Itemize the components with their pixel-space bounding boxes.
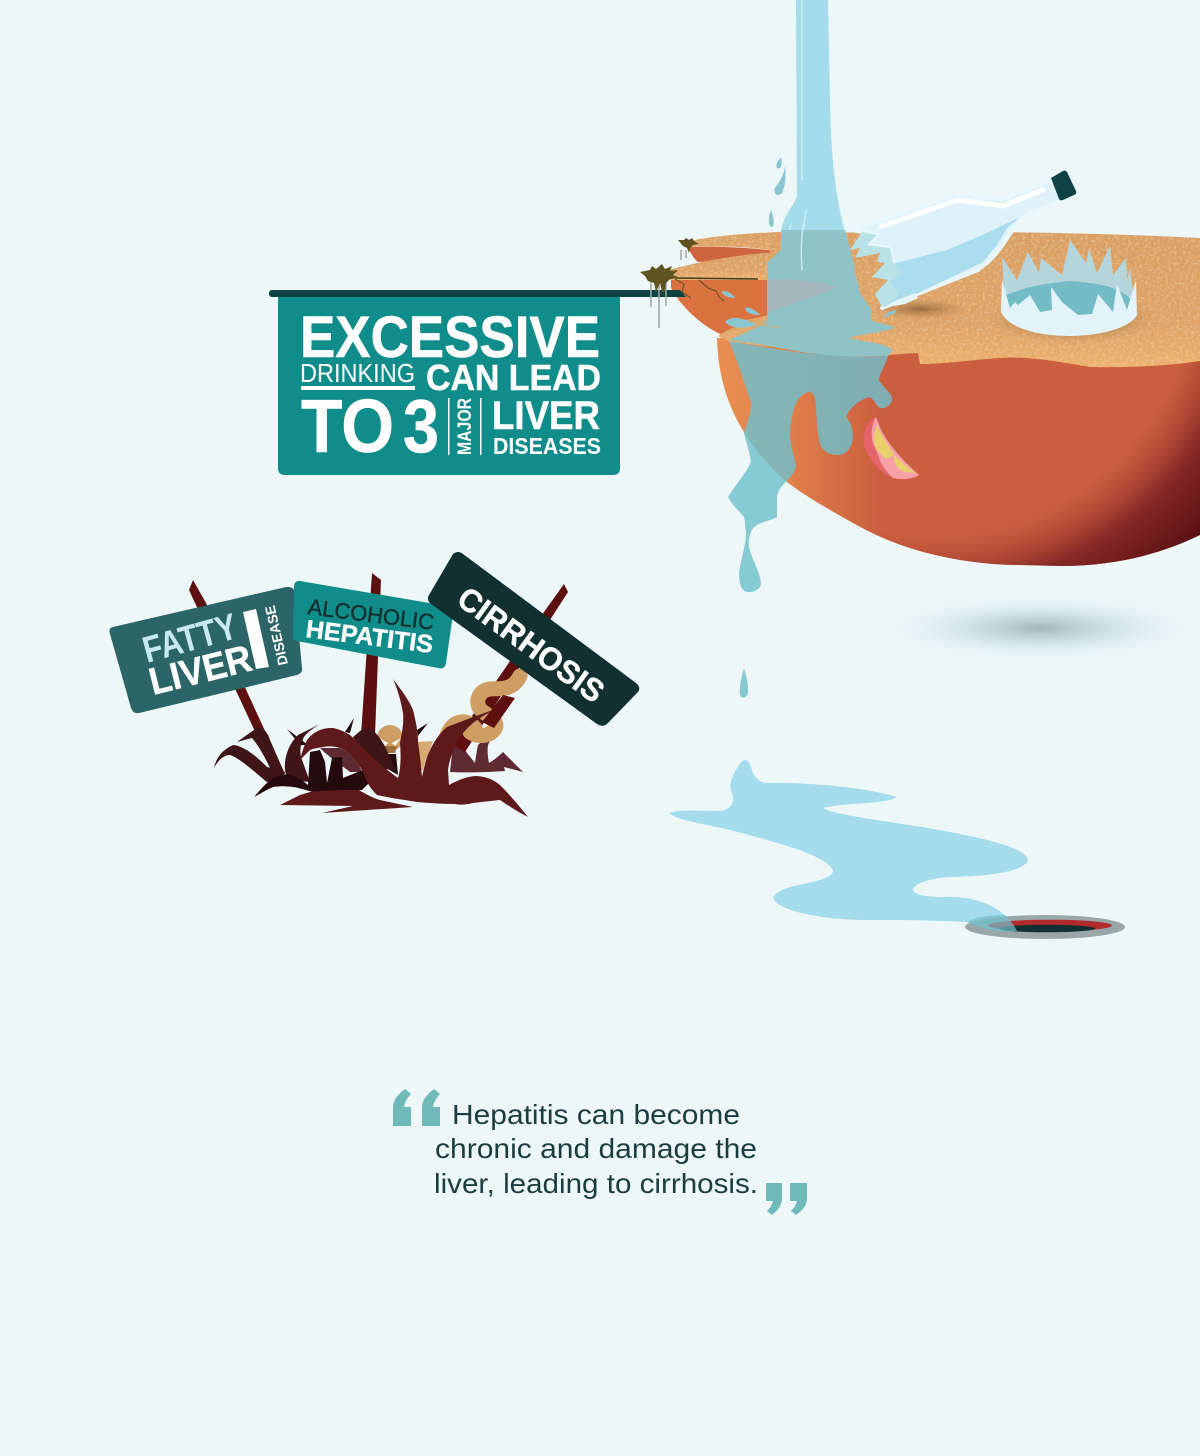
grey water reflection — [767, 279, 836, 314]
title: diseases: DISEASES — [493, 433, 601, 459]
small spray drops — [722, 291, 760, 315]
sign text: cirrhosis: CIRRHOSIS — [451, 580, 611, 710]
glass front wall — [1001, 280, 1137, 336]
banner top bar — [269, 290, 686, 297]
quote line 2: chronic and damage the — [435, 1133, 757, 1164]
water drops beside stream — [769, 157, 786, 227]
sign text: disease: DISEASE — [262, 604, 291, 667]
liver illustration — [668, 232, 1200, 566]
floating liver shadow — [870, 592, 1200, 664]
broken bottle — [850, 171, 1076, 308]
title: major: MAJOR — [455, 398, 476, 455]
front thorn bush — [300, 679, 528, 817]
middle liver lobe — [668, 252, 782, 335]
sign text: liver: LIVER — [145, 638, 256, 704]
spray drop on surface — [725, 310, 896, 328]
sign: alcoholic hepatitis — [293, 581, 453, 668]
back liver lobe — [686, 232, 782, 262]
purple inner thorn — [320, 748, 362, 772]
water spilling into drain — [967, 915, 1017, 932]
signposts and thorn bush — [109, 552, 639, 817]
water column highlights — [787, 0, 806, 272]
bottle glass — [852, 180, 1062, 308]
glass inner water — [1006, 281, 1131, 318]
sign text: fatty: FATTY — [138, 605, 242, 671]
sign: fatty liver disease — [109, 587, 302, 713]
water running down the liver — [728, 341, 892, 592]
banner panel — [278, 295, 620, 475]
snake neck — [386, 754, 398, 775]
title: drinking: DRINKING — [300, 358, 415, 388]
title banner — [269, 290, 686, 475]
opening quote mark — [393, 1089, 440, 1126]
title: can lead: CAN LEAD — [426, 357, 601, 398]
glass back spikes — [1002, 240, 1134, 312]
title divider left — [448, 398, 450, 455]
title: excessive: EXCESSIVE — [300, 305, 600, 370]
snake head — [377, 725, 403, 753]
signpost section over snake — [482, 695, 515, 728]
water highlight on column — [801, 225, 803, 270]
glass base cast shadow — [988, 292, 1156, 344]
small palm — [678, 238, 699, 253]
upper water column — [781, 0, 845, 232]
title: to: TO — [301, 384, 394, 468]
sign text: hepatitis: HEPATITIS — [304, 615, 435, 659]
bottle bottom tip — [882, 293, 918, 308]
quote line 1: Hepatitis can become — [452, 1099, 740, 1130]
darkest thorn clump — [254, 750, 370, 797]
palm tufts on liver lobes — [640, 238, 699, 328]
middle signpost — [361, 573, 381, 735]
main liver body — [717, 338, 1200, 566]
liver wound — [864, 417, 919, 480]
dark left thorn bush — [214, 724, 395, 784]
back thorn bush — [450, 730, 523, 772]
sign: cirrhosis — [428, 552, 639, 726]
quote line 3: liver, leading to cirrhosis. — [434, 1168, 758, 1199]
large palm — [640, 264, 680, 292]
pool on liver surface — [729, 310, 895, 357]
title divider right — [480, 398, 482, 455]
bottle broken shards — [850, 232, 901, 307]
thorn ground patch — [280, 790, 413, 813]
liver body shading — [717, 338, 1200, 566]
sign white bar — [243, 609, 269, 669]
drain hole — [965, 915, 1125, 939]
snake lower body — [417, 741, 433, 770]
lobe dark crease line — [675, 278, 758, 279]
bottle cap — [1051, 171, 1076, 200]
main sandy liver surface — [718, 232, 1200, 367]
lobe root cracks — [675, 279, 724, 301]
bottle highlight — [880, 190, 1043, 227]
puddle of water — [669, 760, 1028, 931]
sign text: alcoholic: ALCOHOLIC — [306, 594, 436, 635]
falling drop — [740, 668, 748, 698]
bottle cast shadow — [870, 298, 970, 320]
water stream from the top — [725, 0, 896, 698]
thorn spike accents — [287, 718, 428, 745]
lower water column — [767, 230, 872, 326]
left signpost — [189, 580, 284, 772]
right signpost — [452, 584, 568, 752]
palm drip lines — [651, 250, 686, 328]
broken glass base — [1001, 240, 1137, 336]
title: 3: 3 — [403, 384, 439, 468]
snake body — [446, 676, 520, 740]
bottle liquid — [882, 217, 1020, 307]
title underline — [301, 386, 415, 390]
title: liver: LIVER — [492, 394, 600, 438]
quote — [393, 1089, 807, 1215]
closing quote mark — [766, 1183, 807, 1215]
